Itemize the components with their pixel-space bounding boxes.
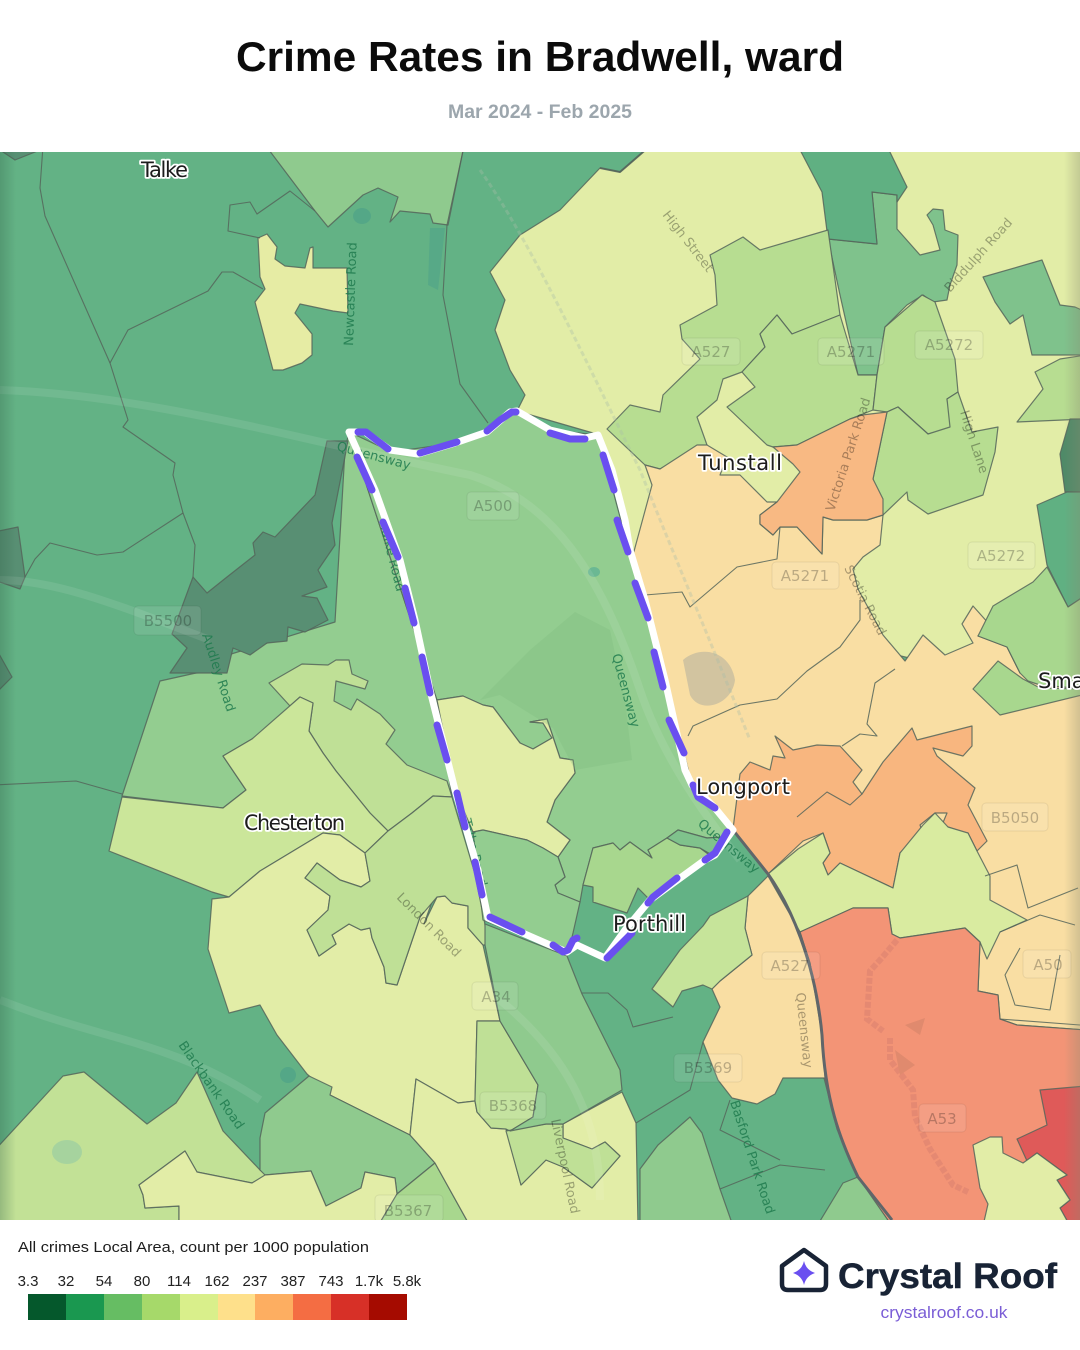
- legend tick labels: 114: [167, 1273, 191, 1290]
- legend tick labels: 54: [96, 1273, 112, 1290]
- road names: Liverpool Road: [547, 1118, 582, 1215]
- road number badges: A500: [474, 497, 512, 515]
- icon: house with star: [782, 1250, 826, 1290]
- legend tick labels: 5.8k: [393, 1273, 422, 1290]
- website url: crystalroof.co.uk: [880, 1304, 1008, 1322]
- legend: [18, 1239, 422, 1320]
- region: A527 peach: [703, 876, 825, 1104]
- internal boundary lines: [0, 146, 1080, 1189]
- region: south west green: [0, 1072, 267, 1226]
- map: crime rate choropleth: [0, 146, 1080, 1226]
- road number badges: A50: [1033, 956, 1063, 974]
- legend colour scale: [28, 1294, 407, 1320]
- region: Chesterton south pale: [208, 833, 500, 1135]
- region: east dark: [1060, 419, 1080, 492]
- region: Smallthorne green: [978, 567, 1080, 689]
- ward boundary: purple dashes: [357, 412, 727, 958]
- road number badges: A5272: [925, 336, 973, 354]
- region: north dark green: [798, 146, 907, 244]
- legend title: All crimes Local Area, count per 1000 population: [18, 1239, 369, 1256]
- region: top north green: [266, 146, 464, 227]
- region: south west mid green: [260, 1076, 435, 1206]
- region: A5271 light green: [727, 315, 877, 447]
- road number badges: B5368: [489, 1097, 537, 1115]
- road names: High Street: [659, 208, 716, 275]
- road names: Blackbank Road: [175, 1039, 247, 1132]
- road names: Victoria Park Road: [824, 396, 874, 513]
- legend tick labels: 3.3: [18, 1273, 38, 1290]
- road number badges: A5271: [781, 567, 829, 585]
- region: Chesterton: [109, 697, 388, 897]
- region: Biddulph medium green: [828, 192, 958, 375]
- ward boundary: white base: [349, 411, 733, 958]
- legend tick labels: 743: [318, 1273, 344, 1290]
- road names: Queensway: [335, 439, 412, 474]
- legend tick labels: 80: [134, 1273, 150, 1290]
- road names: Biddulph Road: [942, 216, 1016, 296]
- vignette: [0, 152, 1080, 1220]
- region: dark woodland: [170, 441, 348, 673]
- hillshade and water details: [0, 170, 968, 1200]
- road number badges: B5369: [684, 1059, 732, 1077]
- legend tick labels: 162: [204, 1273, 230, 1290]
- road names: Basford Park Road: [726, 1099, 777, 1216]
- legend tick labels: 387: [280, 1273, 306, 1290]
- road names: Audley Road: [198, 632, 238, 714]
- road number badges: A34: [481, 988, 511, 1006]
- region: south west pale: [139, 1151, 397, 1226]
- region: north east medium green: [983, 260, 1080, 355]
- road number badges: A53: [927, 1110, 957, 1128]
- region: north east pale: [490, 146, 1080, 700]
- region: ward yellow inlet: [437, 696, 575, 857]
- road names: Talke Road: [458, 816, 489, 888]
- region: south light green: [475, 1021, 538, 1131]
- region: south ward green: [485, 924, 622, 1131]
- region: Porthill light green: [583, 838, 712, 913]
- region: Hanley salmon: [800, 908, 1080, 1226]
- region: Porthill pale green: [652, 896, 752, 1007]
- road names: Talke Road: [376, 521, 407, 593]
- place labels: Longport: [696, 775, 790, 799]
- road number badges: [134, 331, 1071, 1222]
- road number badges: A5271: [827, 343, 875, 361]
- road names: London Road: [393, 890, 463, 961]
- region: south east pale: [973, 1137, 1070, 1226]
- region: mid Chesterton green: [305, 796, 489, 985]
- road number badges: B5050: [991, 809, 1039, 827]
- region: west green: [122, 432, 452, 813]
- logo: Crystal Roof: [782, 1250, 1057, 1322]
- road number badges: A5272: [977, 547, 1025, 565]
- region: Victoria Park orange: [760, 412, 887, 554]
- legend tick labels: [18, 1273, 422, 1290]
- road: Queensway heavy line: [733, 830, 892, 1220]
- legend tick labels: 1.7k: [355, 1273, 384, 1290]
- title: Crime Rates in Bradwell, ward: [236, 33, 844, 80]
- place labels: Porthill: [613, 912, 686, 936]
- region: Longport orange: [733, 726, 987, 888]
- road number badges: B5500: [144, 612, 192, 630]
- region: A527 light green: [607, 230, 840, 469]
- region: Bradwell ward main: [349, 412, 733, 902]
- subtitle: date range: Mar 2024 - Feb 2025: [448, 102, 632, 123]
- place labels: [140, 158, 1080, 936]
- region: south pale: [410, 1079, 638, 1226]
- region: south mid green: [640, 1117, 733, 1226]
- road number badges: B5367: [384, 1202, 432, 1220]
- road names: Queensway: [792, 992, 815, 1069]
- road names: Queensway: [608, 652, 642, 730]
- logo wordmark: Crystal Roof: [838, 1257, 1057, 1296]
- road names: High Lane: [956, 409, 991, 476]
- road names: Newcastle Road: [342, 242, 361, 346]
- place labels: Chesterton: [244, 811, 345, 835]
- road number badges: A527: [771, 957, 809, 975]
- road names: Scotia Road: [840, 563, 889, 638]
- region: Tunstall and south east peach: [633, 445, 1080, 1030]
- region: Hanley red: [1017, 1086, 1080, 1226]
- region: upper Chesterton: [269, 660, 452, 831]
- region: A5272 light green: [873, 295, 958, 434]
- road names: [175, 208, 1016, 1216]
- road names: Queensway: [694, 817, 762, 877]
- region: south pale green: [768, 813, 1027, 959]
- place labels: Tunstall: [697, 451, 782, 475]
- region: northern pale estate: [255, 234, 348, 370]
- legend tick labels: 237: [242, 1273, 268, 1290]
- road number badges: A527: [692, 343, 730, 361]
- place labels: Talke: [140, 158, 188, 182]
- region: ward south block: [473, 830, 580, 953]
- legend tick labels: 32: [58, 1273, 74, 1290]
